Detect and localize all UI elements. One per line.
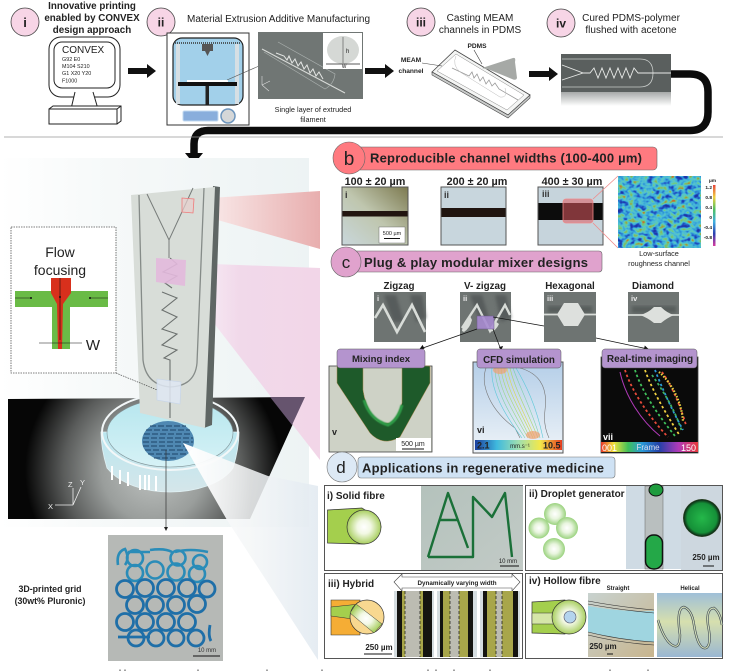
heat map colour scale: -0.4 [704, 225, 712, 231]
panel: flow focusing inset [11, 227, 116, 373]
panel: mixing index: v [332, 427, 337, 437]
main illustration: printing chip and dish [0, 158, 320, 660]
caption: roughness: Low-surface [639, 249, 679, 258]
beam: pink zoom to mixers [185, 263, 320, 460]
panel: real-time imaging: Frame [636, 443, 660, 452]
caption: single layer: Single layer of extruded [275, 105, 351, 114]
section c heading: c [342, 253, 351, 272]
label: 3D-printed grid: 3D-printed grid [18, 584, 82, 594]
arrow: casting to cured [529, 67, 558, 81]
panel: CFD simulation: 2.1 [477, 440, 490, 450]
icon: MEAM casting tray: MEAM [401, 57, 422, 64]
step i: label circle [11, 8, 39, 36]
axes: Y [80, 478, 85, 487]
panel: real-time imaging [601, 357, 698, 453]
panel: solid fibre: i) Solid fibre [327, 491, 385, 502]
heat map colour scale: µm [709, 179, 716, 184]
panel: hollow fibre: 250 µm [589, 642, 617, 651]
double arrow: varying width: Dynamically varying width [417, 580, 497, 587]
heat map colour scale: 0.4 [705, 205, 712, 211]
arrow: computer to printer [128, 64, 156, 78]
icon: MEAM casting tray [399, 43, 530, 118]
red selection [182, 198, 194, 213]
printed grid in dish [142, 421, 194, 461]
step iii: label circle [407, 8, 435, 36]
panel: mixing index: 500 µm [401, 441, 425, 448]
icon: CONVEX computer: M104 S210 [62, 64, 90, 70]
tile: diamond: iv [631, 294, 638, 303]
step iv heading [582, 13, 681, 36]
icon: CONVEX computer: G1 X20 Y20 [62, 71, 91, 77]
icon: MEAM casting tray: PDMS [467, 43, 487, 50]
panel: flow focusing inset: W [86, 337, 101, 354]
icon: CONVEX computer: CONVEX [62, 45, 105, 56]
panel: cured PDMS channel [561, 54, 671, 106]
tile: zigzag: i [377, 294, 379, 303]
section c heading [331, 247, 602, 277]
panel: real-time imaging: 001 [602, 443, 617, 453]
panel: real-time imaging: vii [603, 432, 613, 442]
panel: single extruded layer: h [346, 49, 349, 55]
panel: droplet generator: ii) Droplet generator [529, 489, 625, 500]
caption: roughness [628, 249, 690, 268]
axes: Z [68, 480, 73, 489]
section b heading [333, 142, 657, 174]
panel: solid fibre [324, 486, 523, 570]
beam: white fan to applications [183, 443, 318, 660]
printed chip [131, 186, 220, 428]
pink selection [156, 258, 186, 286]
step iii heading: Casting MEAM [447, 13, 513, 24]
label: real-time imaging: Real-time imaging [607, 354, 693, 365]
caption: single layer [275, 105, 351, 124]
micrograph ii: 200 µm: 200 ± 20 µm [447, 176, 507, 188]
label: mixing index: Mixing index [352, 354, 411, 365]
mixer labels: Hexagonal [545, 281, 595, 292]
hybrid micrographs [394, 591, 520, 657]
label: 3D-printed grid: (30wt% Pluronic) [15, 596, 86, 606]
panel: hybrid fibre [324, 574, 522, 658]
step i: label circle: i [23, 15, 27, 30]
micrograph ii: 200 µm [441, 176, 507, 245]
photo: 3D-printed grid [108, 535, 223, 661]
heat map colour scale: 0 [709, 215, 712, 221]
panel: CFD simulation: mm.s⁻¹ [510, 444, 530, 450]
arrow: long connector to main figure [185, 74, 708, 164]
step i heading [44, 1, 140, 36]
micrograph iii: 400 µm [538, 176, 603, 245]
step iii: label circle: iii [416, 16, 426, 30]
heat map colour scale: 1.2 [705, 185, 712, 191]
tile: hexagonal [544, 292, 596, 342]
step iv heading: flushed with acetone [585, 25, 677, 36]
icon: MEAM casting tray: channel [399, 68, 424, 75]
tile: zigzag [374, 292, 426, 342]
tile: V-zigzag [460, 292, 511, 342]
selection: purple region [477, 316, 494, 329]
arrow: filament to casting [365, 64, 394, 78]
heat map colour scale: -0.8 [704, 235, 712, 241]
double arrow: varying width [394, 574, 520, 591]
panel: flow focusing inset: Flow [45, 244, 76, 260]
black print bed [8, 397, 305, 519]
panel: hollow fibre: iv) Hollow fibre [529, 576, 601, 587]
zoom leader lines [593, 176, 618, 248]
panel: CFD simulation: 10.5 [543, 440, 561, 450]
panel: droplet generator [526, 484, 722, 570]
heat map colour scale [704, 179, 716, 246]
step iii heading: channels in PDMS [439, 25, 521, 36]
panel: real-time imaging: 150 [681, 443, 696, 453]
section d heading [327, 452, 615, 482]
micrograph i: 100 µm: i [345, 190, 348, 200]
arrow: dish to printed grid photo [164, 450, 168, 531]
step iv: label circle [547, 9, 575, 37]
icon: CONVEX computer: F1000 [62, 78, 77, 84]
arrows: to analysis panels [420, 317, 648, 350]
panel: droplet generator: 250 µm [692, 553, 720, 562]
section b heading: Reproducible channel widths (100-400 µm) [370, 150, 642, 166]
caption: roughness: roughness channel [628, 259, 690, 268]
leader to flow focusing [116, 373, 157, 390]
panel: CFD simulation: vi [477, 425, 485, 435]
mixer labels: Diamond [632, 281, 674, 292]
step iv heading: Cured PDMS-polymer [582, 13, 681, 24]
micrograph iii: 400 µm: iii [542, 189, 550, 199]
mixer labels: V- zigzag [464, 281, 506, 292]
step iv: label circle: iv [556, 16, 566, 30]
label: CFD simulation: CFD simulation [483, 355, 555, 366]
panel: hybrid fibre: 250 µm [365, 643, 393, 652]
micrograph ii: 200 µm: ii [444, 190, 449, 200]
step i heading: enabled by CONVEX [44, 13, 140, 24]
step i heading: design approach [53, 25, 131, 36]
axes: X [48, 502, 53, 511]
panel: solid fibre: 10 mm [499, 559, 517, 565]
label: real-time imaging [602, 349, 697, 368]
section b heading: b [344, 149, 354, 170]
section d heading: d [336, 458, 346, 477]
panel: single extruded layer [258, 32, 363, 99]
mixer labels: Zigzag [383, 281, 415, 292]
petri dish [101, 394, 239, 492]
step ii: label circle [147, 8, 175, 36]
icon: CONVEX computer [49, 37, 121, 124]
panel: hollow fibre [526, 574, 722, 658]
micrograph i: 100 µm: 500 µm [383, 231, 402, 237]
label: 3D-printed grid [15, 584, 86, 606]
mixer labels [383, 281, 674, 292]
blue selection [157, 379, 181, 404]
label: CFD simulation [477, 349, 561, 368]
step iii heading [439, 13, 521, 36]
micrograph i: 100 µm: 100 ± 20 µm [345, 176, 405, 188]
beam: red zoom to channels [193, 191, 320, 249]
section d heading: Applications in regenerative medicine [362, 460, 604, 476]
micrograph iii: 400 µm: 400 ± 30 µm [542, 176, 602, 188]
beam overlap on bed [270, 397, 305, 425]
icon: 3D printer [167, 33, 259, 125]
photo: 3D-printed grid: 10 mm [198, 648, 216, 654]
caption: single layer: filament [300, 115, 326, 124]
step ii: label circle: ii [158, 16, 164, 30]
step ii heading: Material Extrusion Additive Manufacturing [187, 14, 370, 25]
step i heading: Innovative printing [48, 1, 136, 12]
panel: hybrid fibre: iii) Hybrid [328, 579, 374, 590]
icon: CONVEX computer: G92 E0 [62, 57, 80, 63]
panel: hollow fibre: Helical [680, 586, 700, 592]
panel: hollow fibre: Straight [607, 586, 629, 592]
micrograph i: 100 µm [342, 176, 408, 245]
label: mixing index [337, 349, 425, 368]
section c heading: Plug & play modular mixer designs [364, 255, 588, 270]
chart: surface roughness heat map [618, 176, 701, 248]
tile: V-zigzag: ii [463, 294, 467, 303]
tile: hexagonal: iii [547, 294, 553, 303]
panel: flow focusing inset: focusing [34, 262, 86, 278]
panel: single extruded layer: w [341, 64, 347, 70]
heat map colour scale: 0.8 [705, 195, 712, 201]
axes [48, 478, 85, 511]
pale backdrop [0, 158, 309, 527]
panel: CFD simulation [473, 362, 563, 453]
divider [4, 136, 723, 138]
tile: diamond [628, 292, 679, 342]
panel: mixing index [329, 366, 432, 452]
